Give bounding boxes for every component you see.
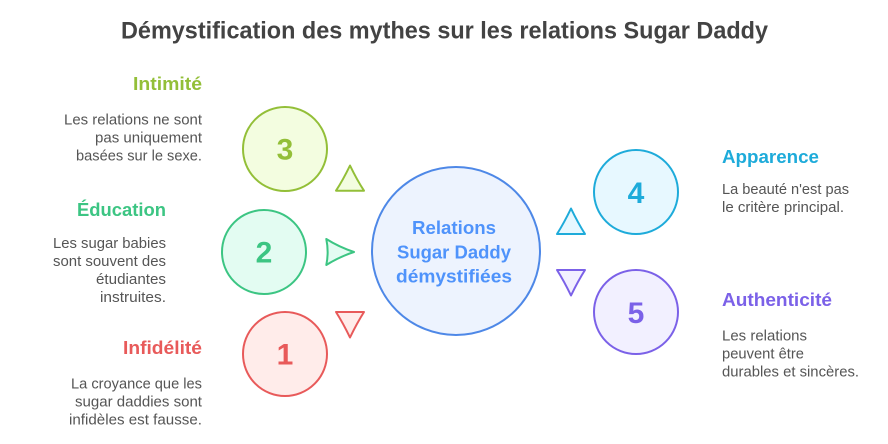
text block: Infidélité description	[69, 376, 203, 428]
central circle: Relations	[412, 217, 496, 238]
text block: Intimité description: Les relations ne sont	[64, 112, 203, 128]
panel: Apparence text	[722, 146, 849, 216]
text block: Apparence description: le critère principal.	[722, 199, 844, 216]
panel: Intimité text	[64, 73, 203, 164]
text block: Intimité description	[64, 112, 203, 164]
heading: Éducation: Éducation	[77, 199, 166, 220]
text block: Apparence description	[722, 181, 849, 216]
panel: Authenticité text	[722, 289, 859, 380]
circle 3	[243, 107, 327, 191]
circle 5: 5	[628, 297, 644, 330]
text block: Infidélité description: La croyance que les	[71, 376, 202, 392]
panel: Éducation text	[53, 199, 166, 306]
arrow: triangle to 4	[557, 208, 585, 234]
circle 2	[222, 210, 306, 294]
central circle	[372, 167, 540, 335]
text block: Apparence description: La beauté n'est pas	[722, 181, 849, 198]
title: Démystification des mythes sur les relations Sugar Daddy	[121, 18, 768, 44]
arrow: triangle to 1	[336, 312, 364, 338]
circle 5	[594, 270, 678, 354]
central circle: Sugar Daddy	[397, 242, 512, 262]
circle 1: 1	[277, 338, 293, 372]
text block: Éducation description: Les sugar babies	[53, 235, 166, 252]
text block: Authenticité description: Les relations	[722, 328, 807, 344]
text block: Éducation description: instruites.	[100, 289, 166, 306]
text block: Infidélité description: sugar daddies sont	[75, 394, 203, 410]
text block: Infidélité description: infidèles est fausse.	[69, 412, 202, 428]
central circle: démystifiées	[396, 266, 512, 286]
arrow: triangle to 2	[326, 239, 354, 265]
text block: Authenticité description: durables et sincères.	[722, 364, 859, 380]
heading: Infidélité: Infidélité	[123, 337, 202, 358]
circle 3: 3	[277, 134, 293, 166]
circle 1	[243, 312, 327, 396]
text block: Authenticité description: peuvent être	[722, 346, 804, 362]
circle 2: 2	[256, 236, 272, 270]
heading: Apparence: Apparence	[722, 146, 819, 167]
panel: Infidélité text	[69, 337, 203, 428]
heading: Authenticité: Authenticité	[722, 289, 832, 310]
arrow: triangle to 3	[336, 166, 364, 191]
text block: Intimité description: basées sur le sexe.	[76, 148, 202, 164]
text block: Authenticité description	[722, 328, 859, 380]
text block: Éducation description: sont souvent des	[53, 253, 166, 270]
arrow: triangle to 5	[557, 270, 585, 296]
text block: Intimité description: pas uniquement	[95, 130, 203, 146]
circle 4: 4	[628, 177, 645, 210]
text block: Éducation description: étudiantes	[96, 271, 166, 288]
circle 4	[594, 150, 678, 234]
text block: Éducation description	[53, 235, 166, 306]
heading: Intimité: Intimité	[133, 73, 202, 94]
